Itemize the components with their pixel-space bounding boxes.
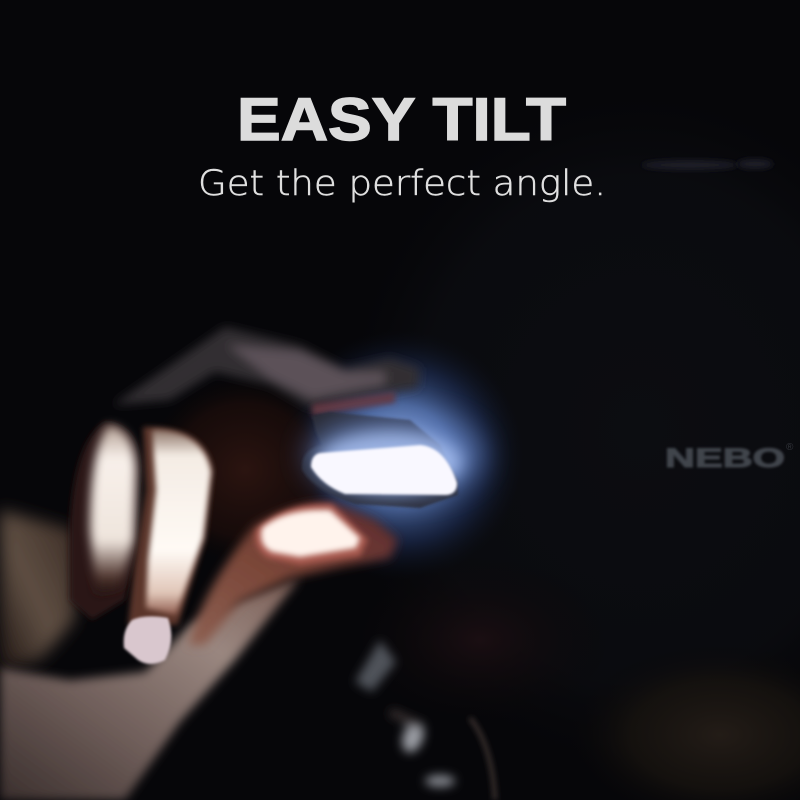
background: dark headlamp on head <box>340 90 800 800</box>
lens halo <box>318 432 462 492</box>
NEBO logo: NEBO <box>665 443 785 473</box>
upper finger <box>113 327 420 408</box>
subtitle: Get the perfect angle. <box>198 164 606 204</box>
thumb <box>188 502 398 645</box>
middle finger <box>128 427 213 625</box>
thumb lit area <box>261 510 360 557</box>
headband edge <box>470 718 495 800</box>
back of hand shadow <box>145 375 345 565</box>
fingertip edge <box>312 392 395 416</box>
wide halo <box>307 413 483 497</box>
illuminated lens <box>311 445 457 495</box>
left palm lit <box>0 510 75 670</box>
title: EASY TILT <box>237 86 566 153</box>
index finger <box>90 425 136 594</box>
headband strap highlights <box>355 640 455 787</box>
headlamp module <box>302 412 483 508</box>
hand <box>0 327 420 800</box>
blue light glow <box>275 330 525 580</box>
module body <box>302 412 458 508</box>
palm and wrist <box>0 578 300 800</box>
index finger shadow <box>70 422 140 620</box>
thumb rim <box>255 504 368 565</box>
fingernail <box>124 616 171 664</box>
NEBO logo <box>665 442 794 473</box>
NEBO logo: ® <box>786 442 794 453</box>
